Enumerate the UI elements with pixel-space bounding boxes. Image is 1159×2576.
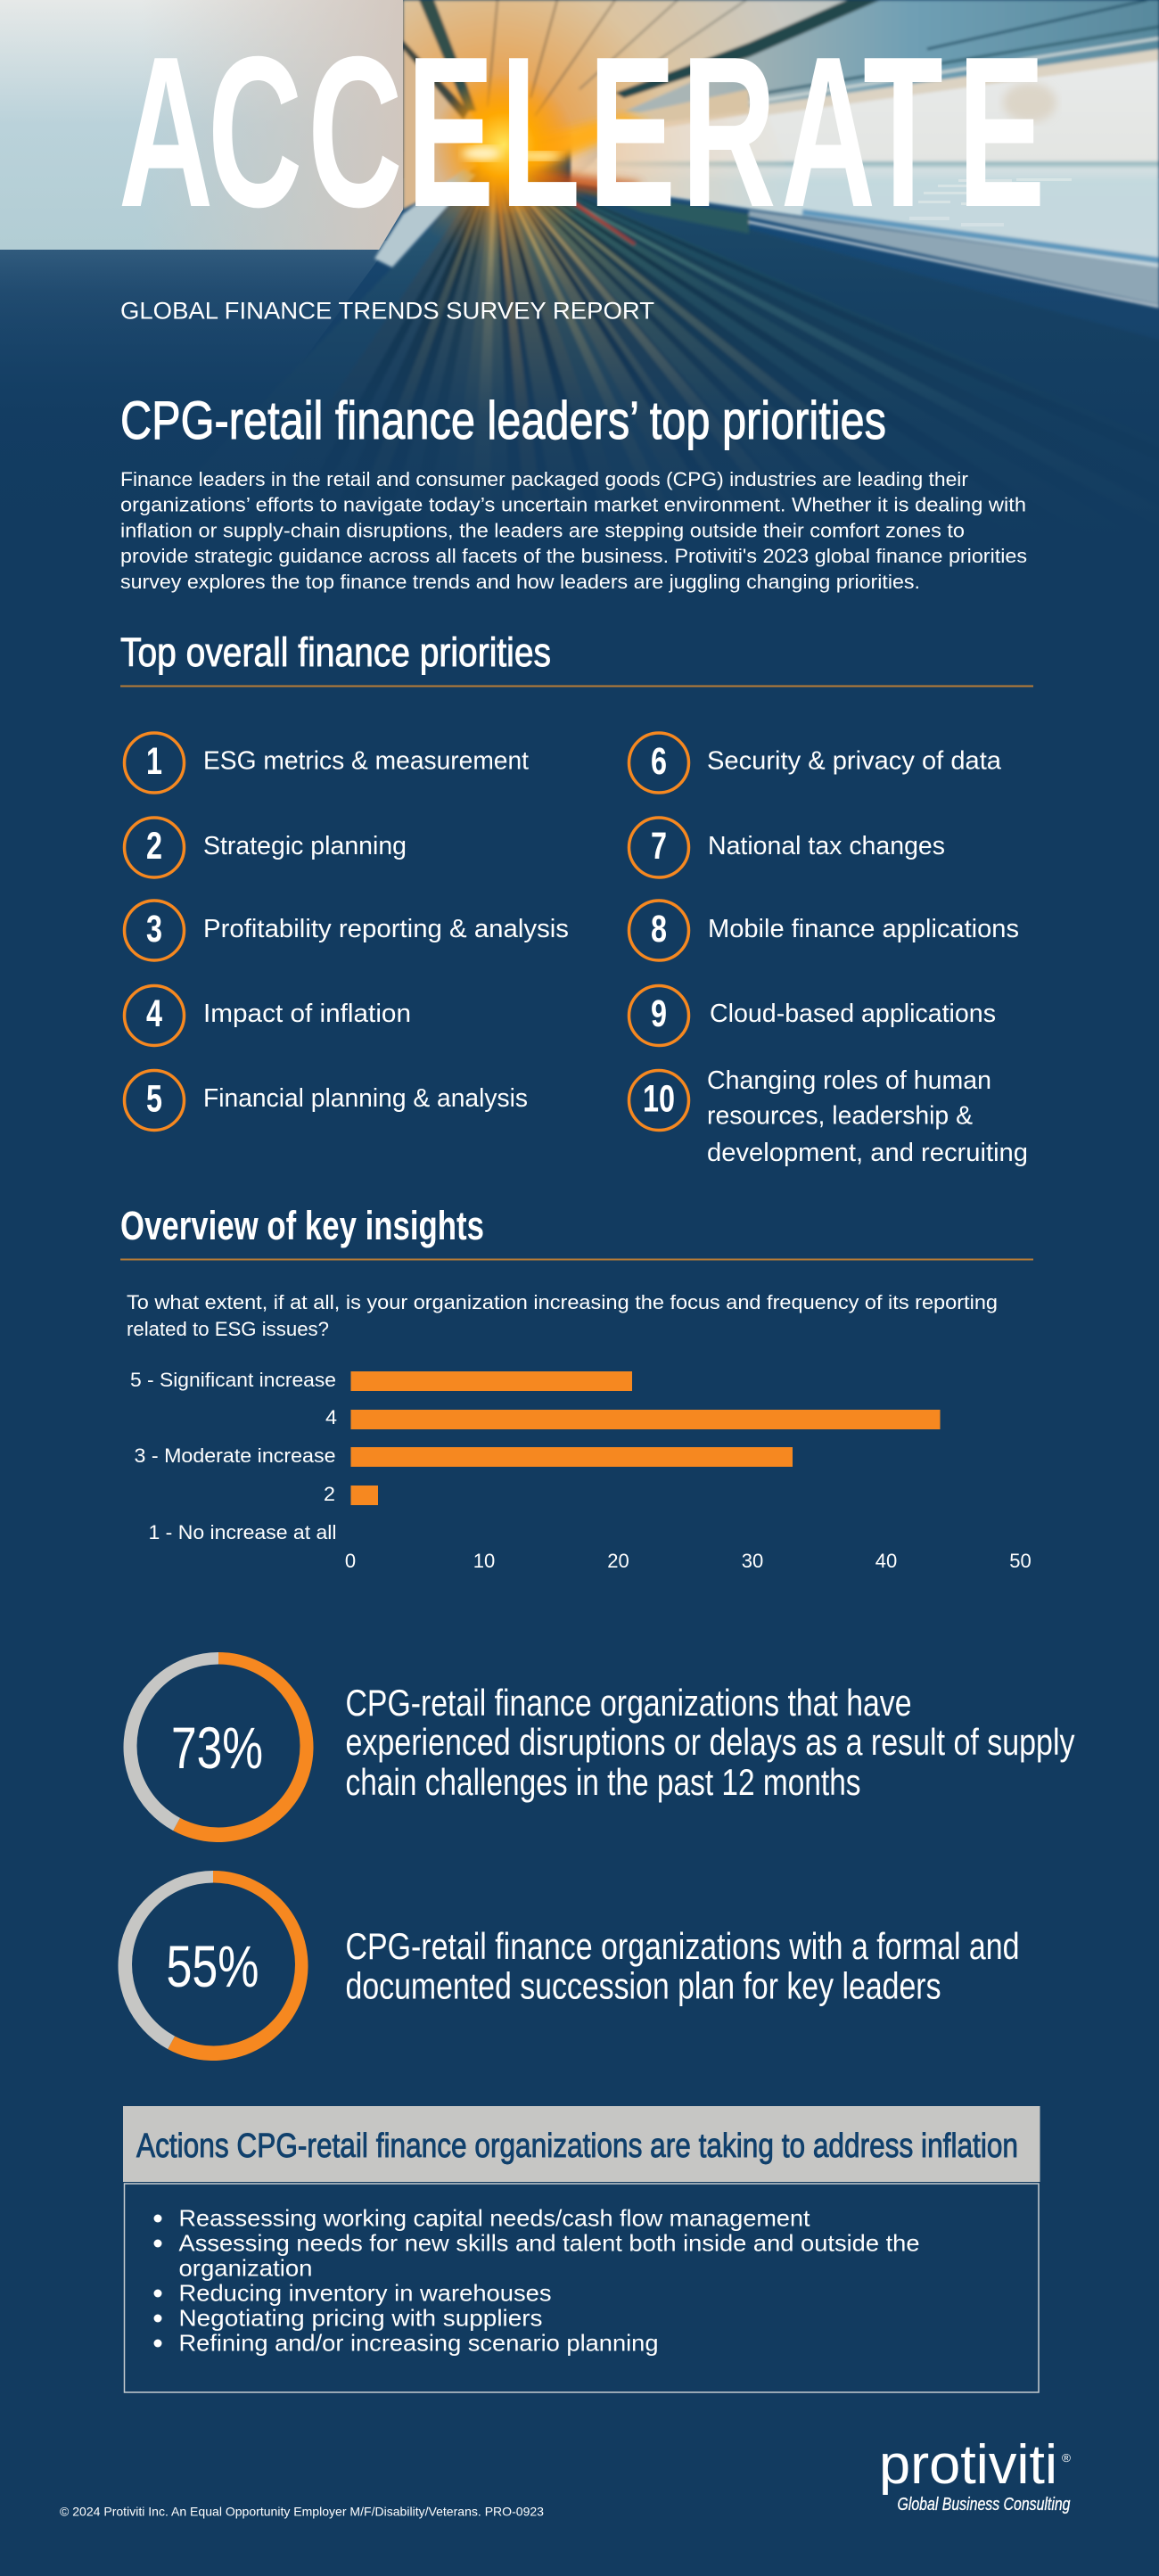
description 73%: CPG-retail finance organizations that have [346, 1682, 911, 1724]
panel body: organization [178, 2254, 312, 2281]
priority 8: Mobile finance applications [708, 915, 1019, 943]
survey question: To what extent, if at all, is your organization increasing the focus and frequency of its reporting [127, 1291, 998, 1313]
category labels: 5 - Significant increase [130, 1369, 336, 1391]
x axis: 30 [742, 1550, 763, 1572]
donut 55%: 55% [166, 1933, 259, 1999]
bar chart [130, 1369, 1032, 1572]
x axis: 40 [875, 1550, 897, 1572]
category labels [130, 1369, 337, 1543]
stat: 73% [124, 1652, 1075, 1842]
x axis: 20 [607, 1550, 629, 1572]
copyright footer: © 2024 Protiviti Inc. An Equal Opportunity Employer M/F/Disability/Veterans. PRO-0923 [60, 2504, 544, 2518]
stat: 55% [119, 1871, 1020, 2061]
category labels: 4 [325, 1406, 337, 1428]
priority 1 [125, 733, 529, 793]
priority 7: 7 [651, 825, 667, 868]
priority 4: Impact of inflation [203, 1000, 411, 1028]
category labels: 3 - Moderate increase [134, 1444, 335, 1467]
donut 73%: 73% [171, 1715, 263, 1781]
priority 8: 8 [651, 908, 667, 951]
category labels: 2 [324, 1483, 335, 1505]
priority 4 [125, 986, 411, 1045]
priority 6 [629, 733, 1002, 793]
description 55%: CPG-retail finance organizations with a formal and [346, 1925, 1020, 1967]
description 73% [346, 1682, 1075, 1803]
panel body: Reducing inventory in warehouses [178, 2279, 551, 2306]
intro paragraph: Finance leaders in the retail and consumer packaged goods (CPG) industries are leading their [120, 468, 968, 490]
priority 9 [629, 986, 996, 1045]
intro paragraph: provide strategic guidance across all facets of the business. Protiviti's 2023 global finance priorities [120, 545, 1027, 567]
priority 3: Profitability reporting & analysis [203, 915, 569, 943]
priorities list [125, 733, 1028, 1167]
priority 4: 4 [146, 992, 162, 1035]
panel body: Refining and/or increasing scenario planning [178, 2329, 658, 2356]
priority 5: 5 [146, 1077, 162, 1120]
intro paragraph: survey explores the top finance trends and how leaders are juggling changing priorities. [120, 571, 920, 593]
intro paragraph: organizations’ efforts to navigate today’s uncertain market environment. Whether it is dealing with [120, 494, 1026, 515]
priority 2: 2 [146, 825, 162, 868]
panel: actions to address inflation [123, 2106, 1040, 2392]
priority 2 [125, 818, 407, 877]
priority 8 [629, 901, 1019, 960]
priority 5: Financial planning & analysis [203, 1084, 528, 1113]
priority 7: National tax changes [708, 832, 945, 860]
survey question [127, 1291, 998, 1340]
priority 10 [629, 1066, 1028, 1167]
priority 10: resources, leadership & [707, 1102, 973, 1131]
logo: protiviti: ® [1062, 2451, 1071, 2465]
category labels: 1 - No increase at all [148, 1521, 337, 1543]
priority 9: Cloud-based applications [710, 1000, 996, 1028]
x axis [345, 1550, 1032, 1572]
intro paragraph [120, 468, 1027, 593]
x axis: 50 [1009, 1550, 1032, 1572]
panel body [125, 2184, 1039, 2392]
donut 73% [124, 1652, 314, 1842]
priority 9: 9 [651, 992, 667, 1035]
donut 55% [119, 1871, 308, 2061]
priority 10: 10 [643, 1077, 675, 1120]
panel body: Assessing needs for new skills and talent both inside and outside the [178, 2229, 920, 2256]
heading: top overall finance priorities: Top overall finance priorities [120, 630, 551, 675]
priority 10: development, and recruiting [707, 1139, 1028, 1167]
logo: protiviti [879, 2434, 1071, 2514]
priority 7 [629, 818, 945, 877]
priority 2: Strategic planning [203, 832, 407, 860]
intro paragraph: inflation or supply-chain disruptions, the leaders are stepping outside their comfort zones to [120, 519, 965, 542]
panel body: Reassessing working capital needs/cash flow management [178, 2204, 810, 2231]
priority 3: 3 [146, 908, 162, 951]
panel body: Negotiating pricing with suppliers [178, 2304, 542, 2331]
title: ACCELERATE: ACCELERATE [119, 12, 1045, 252]
priority 3 [125, 901, 569, 960]
bars [351, 1371, 940, 1505]
logo: protiviti: protiviti [879, 2434, 1057, 2496]
description 73%: chain challenges in the past 12 months [346, 1761, 861, 1803]
priority 6: 6 [651, 740, 667, 783]
pale translucent panel at top left [0, 0, 403, 250]
x axis: 10 [473, 1550, 495, 1572]
x axis: 0 [345, 1550, 356, 1572]
survey question: related to ESG issues? [127, 1318, 329, 1340]
logo: protiviti: Global Business Consulting [897, 2495, 1070, 2514]
heading: overview of key insights: Overview of key insights [120, 1203, 484, 1248]
description 55%: documented succession plan for key leaders [346, 1965, 941, 2006]
priority 10: Changing roles of human [707, 1066, 991, 1095]
header photo: motion-blurred tunnel [0, 0, 1159, 489]
priority 1: 1 [146, 740, 162, 783]
priority 6: Security & privacy of data [707, 747, 1002, 776]
heading: top priorities: CPG-retail finance leaders’ top priorities [120, 391, 886, 450]
subtitle: GLOBAL FINANCE TRENDS SURVEY REPORT [120, 298, 654, 325]
priority 5 [125, 1070, 528, 1131]
panel header [123, 2106, 1040, 2182]
description 55% [346, 1925, 1020, 2006]
priority 1: ESG metrics & measurement [203, 747, 529, 776]
